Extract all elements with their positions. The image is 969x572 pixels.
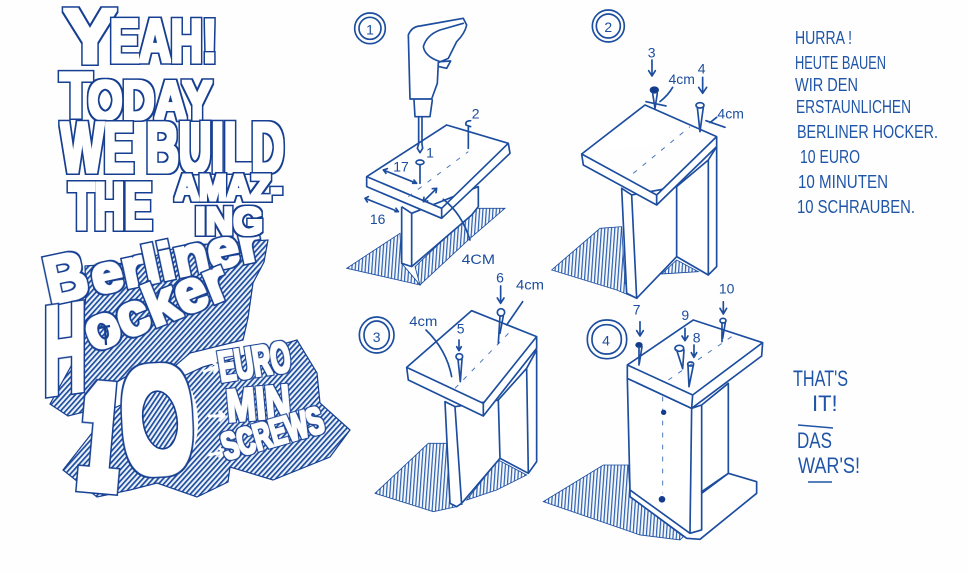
heading: yeah today we build the amazing xyxy=(60,0,284,244)
stool body xyxy=(622,147,717,298)
heading: euro: EURO xyxy=(215,332,294,392)
screw position dashes xyxy=(408,152,468,197)
heading: Berliner: B xyxy=(38,237,94,318)
dimensions xyxy=(409,276,544,377)
text block: closing note: DAS xyxy=(797,428,832,453)
text block: German introduction: HURRA ! xyxy=(795,28,852,48)
dimensions: 4cm xyxy=(516,276,544,292)
heading: yeah today we build the amazing: T xyxy=(60,59,92,131)
arrows to euro min screws xyxy=(203,362,224,458)
screw 2 xyxy=(466,105,480,148)
heading: big 10: 0 xyxy=(118,337,197,503)
screw 5 xyxy=(456,320,465,382)
text block: German introduction: 10 MINUTEN xyxy=(798,172,888,192)
seat board xyxy=(582,105,717,205)
hatched shadow block: 10 euro min screws xyxy=(63,340,350,497)
panel: step 4 xyxy=(543,280,763,540)
dimensions: 4cm xyxy=(717,105,744,121)
step number 1: 1 xyxy=(366,21,374,37)
stool body xyxy=(627,378,728,533)
dimensions: 4cm xyxy=(668,71,695,87)
stool body xyxy=(445,350,537,507)
heading: Hocker: H xyxy=(44,276,86,424)
step number 4 xyxy=(587,320,627,359)
panel: step 3 xyxy=(359,270,544,512)
step number 2 xyxy=(592,10,624,42)
shadow xyxy=(347,208,505,285)
shadow xyxy=(543,465,683,540)
heading: Berliner xyxy=(38,200,266,318)
screw 10 xyxy=(719,280,735,342)
base board xyxy=(630,473,757,539)
screw position dashes xyxy=(455,328,513,388)
text block: German introduction: 10 EURO xyxy=(800,147,860,167)
dimensions xyxy=(365,159,495,267)
seat board xyxy=(407,311,537,416)
step number 4: 4 xyxy=(602,332,610,348)
screw 1: 1 xyxy=(426,144,434,160)
screw position dashes xyxy=(633,127,690,173)
heading: yeah today we build the amazing: THE xyxy=(69,169,152,244)
screw 3: 3 xyxy=(648,44,656,60)
panel: step 1 xyxy=(347,13,510,285)
shadow xyxy=(375,443,527,512)
screw 9: 9 xyxy=(681,307,689,323)
text block: closing note: THAT'S xyxy=(793,366,848,391)
screw 2: 2 xyxy=(472,105,480,121)
heading: Berliner: erliner xyxy=(85,214,266,306)
dimensions xyxy=(646,71,744,127)
hatched shadow block: Berliner Hocker xyxy=(50,240,268,416)
step number 3 xyxy=(359,317,394,353)
text block: German introduction: BERLINER HOCKER. xyxy=(797,122,938,142)
heading: yeah today we build the amazing: ODAY xyxy=(88,69,212,131)
title lettering xyxy=(38,0,350,521)
stool legs and panel xyxy=(402,187,478,267)
heading: yeah today we build the amazing: ING xyxy=(195,201,263,243)
text block: closing note: IT! xyxy=(812,391,838,416)
dimensions: 4cm xyxy=(409,313,437,329)
screw 6 xyxy=(496,270,505,343)
heading: yeah today we build the amazing: WE BUILD xyxy=(61,109,284,188)
screw 8: 8 xyxy=(693,330,701,346)
heading: Hocker xyxy=(44,248,237,424)
text block: German introduction: 10 SCHRAUBEN. xyxy=(797,197,915,217)
step number 3: 3 xyxy=(373,329,381,345)
shadow xyxy=(552,227,698,298)
heading: screws: SCREWS xyxy=(217,400,328,469)
dimensions: 4CM xyxy=(462,251,495,267)
text block: closing note: WAR'S! xyxy=(798,453,860,478)
electric drill xyxy=(408,18,467,153)
heading: big 10: 1 xyxy=(75,354,125,521)
text block: German introduction: ERSTAUNLICHEN xyxy=(796,97,911,117)
screw 4: 4 xyxy=(698,60,706,76)
text block: German introduction: HEUTE BAUEN xyxy=(795,53,886,73)
heading: yeah today we build the amazing: EAH! xyxy=(110,7,217,75)
screw 6: 6 xyxy=(496,270,504,286)
seat board xyxy=(367,125,510,218)
seat board xyxy=(627,320,763,408)
step number 2: 2 xyxy=(604,19,612,35)
screw 4 xyxy=(696,60,707,132)
text block: German introduction xyxy=(795,28,938,217)
screw 7 xyxy=(633,302,643,365)
step number 1 xyxy=(355,13,385,44)
dimensions: 17 xyxy=(393,159,409,175)
screw 7: 7 xyxy=(633,302,641,318)
text block: closing note xyxy=(793,366,860,482)
heading: Hocker: ocker xyxy=(74,248,237,364)
screw position dashes xyxy=(659,337,732,503)
dimensions: 16 xyxy=(370,211,386,227)
panel: step 2 xyxy=(552,10,744,298)
heading: min: MIN xyxy=(224,375,293,432)
text block: German introduction: WIR DEN xyxy=(795,75,858,95)
screw 3 xyxy=(648,44,659,108)
screw 5: 5 xyxy=(457,320,465,336)
screw 8 xyxy=(688,330,701,387)
screw 1 xyxy=(416,144,434,183)
heading: yeah today we build the amazing: AMAZ- xyxy=(175,167,282,208)
heading: big 10 xyxy=(75,337,201,521)
screw 9 xyxy=(675,307,689,369)
screw 10: 10 xyxy=(719,280,735,296)
